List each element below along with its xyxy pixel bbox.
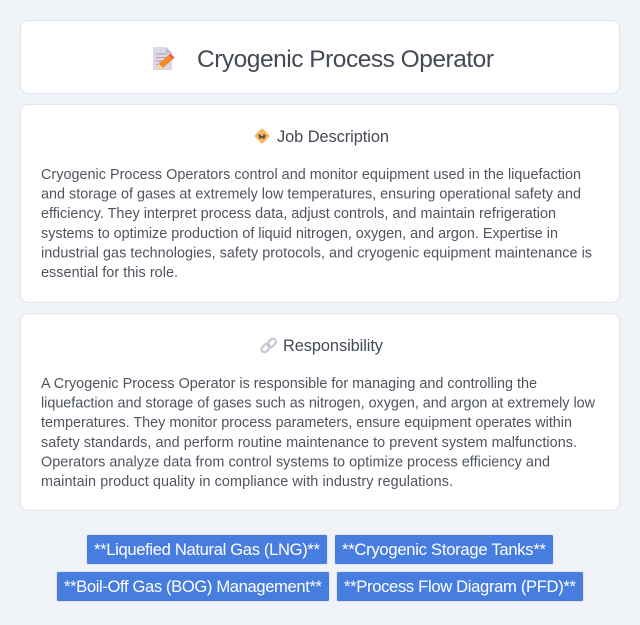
keyword badge: BOG management: **Boil-Off Gas (BOG) Management**: [64, 577, 323, 596]
job description text: efficiency. They interpret process data, adjust controls, and maintain refrigeration: [41, 206, 556, 222]
keyword badge: LNG: [86, 534, 328, 564]
job description text: systems to optimize production of liquid nitrogen, oxygen, and argon. Expertise in: [41, 226, 558, 242]
panel: responsibility: [20, 314, 620, 510]
heading: responsibility: Responsibility: [283, 337, 384, 355]
keyword badge: PFD: **Process Flow Diagram (PFD)**: [344, 577, 577, 596]
keyword badge: storage tanks: **Cryogenic Storage Tanks**: [342, 540, 547, 559]
icon: link: [260, 338, 277, 353]
responsibility text: maintain product quality in compliance with industry regulations.: [41, 474, 453, 490]
keyword badge: LNG: **Liquefied Natural Gas (LNG)**: [94, 540, 321, 559]
icon: memo with pencil: [153, 47, 174, 70]
responsibility text: Operators analyze data from control systems to optimize process efficiency and: [41, 454, 550, 470]
responsibility text: A Cryogenic Process Operator is responsible for managing and controlling the: [41, 376, 537, 392]
panel: job description: [20, 104, 620, 302]
icon: diamond: [254, 128, 270, 144]
job description text: [41, 167, 592, 281]
panel: title: [20, 20, 620, 94]
responsibility text: temperatures. They monitor process parameters, ensure equipment operates within: [41, 415, 572, 431]
heading: job description: Job Description: [277, 128, 389, 146]
responsibility text: safety standards, and perform routine maintenance to prevent system malfunctions.: [41, 435, 577, 451]
keyword badge: storage tanks: [334, 534, 554, 564]
job description text: industrial gas technologies, safety protocols, and cryogenic equipment maintenance is: [41, 245, 592, 261]
keyword badge: PFD: [336, 572, 584, 602]
job description text: essential for this role.: [41, 265, 178, 281]
job description text: Cryogenic Process Operators control and monitor equipment used in the liquefaction: [41, 167, 581, 183]
responsibility text: [41, 376, 596, 490]
keyword badge: BOG management: [56, 572, 330, 602]
job description text: and storage of gases at extremely low temperatures, ensuring operational safety and: [41, 187, 581, 203]
responsibility text: liquefaction and storage of gases such as nitrogen, oxygen, and argon at extremely low: [41, 396, 596, 412]
title text: Cryogenic Process Operator: [197, 46, 494, 73]
